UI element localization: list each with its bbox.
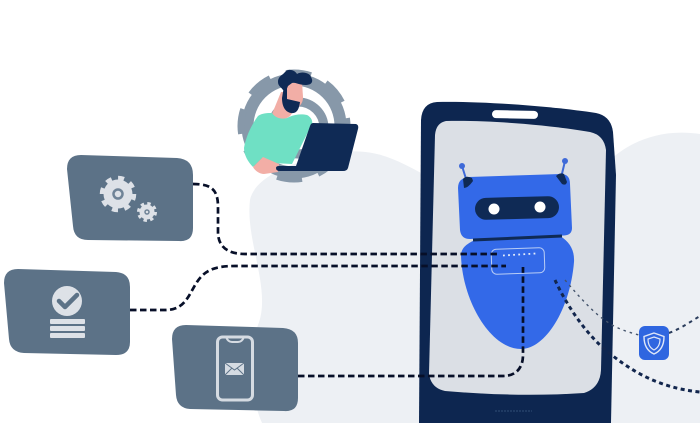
dashed connector: checklist to robot <box>130 266 506 310</box>
phone footer mark <box>495 410 532 412</box>
icon: large gear <box>102 178 134 210</box>
beard <box>282 86 300 113</box>
card: phone message <box>172 325 298 411</box>
antennas <box>459 158 568 182</box>
gear backdrop <box>241 73 347 179</box>
laptop <box>276 123 358 171</box>
phone body <box>419 102 616 423</box>
robot <box>458 158 574 349</box>
robot head <box>458 174 572 239</box>
dotted connector: shield to right edge <box>669 316 700 333</box>
arm <box>253 157 279 174</box>
neck <box>272 92 296 119</box>
dashed connector: robot to right edge <box>555 280 700 392</box>
card: checklist <box>4 269 130 355</box>
illustration: person with laptop and gear <box>241 70 358 179</box>
chest dots <box>503 254 536 256</box>
icon: check badge <box>52 286 82 316</box>
icon: text lines <box>50 319 85 338</box>
chest panel <box>491 248 545 274</box>
icon: shield badge <box>639 326 669 360</box>
eyes <box>488 202 546 214</box>
card: settings gears <box>67 155 193 241</box>
antenna bases <box>463 173 567 188</box>
robot body <box>461 236 574 349</box>
dotted connector: robot to shield <box>565 280 639 335</box>
face <box>283 82 303 109</box>
phone screen <box>429 121 606 395</box>
background blob <box>249 133 700 423</box>
dashed connector: phone to robot <box>298 267 523 376</box>
icon: small phone <box>218 337 252 400</box>
person <box>244 70 312 174</box>
visor <box>475 196 559 220</box>
phone <box>419 102 616 423</box>
hair <box>278 70 312 91</box>
shirt <box>244 113 312 167</box>
neck <box>473 236 562 240</box>
icon: small gear <box>138 204 156 220</box>
dashed connector: settings to robot <box>193 184 497 254</box>
phone speaker <box>492 110 538 119</box>
icon: envelope <box>225 363 244 375</box>
